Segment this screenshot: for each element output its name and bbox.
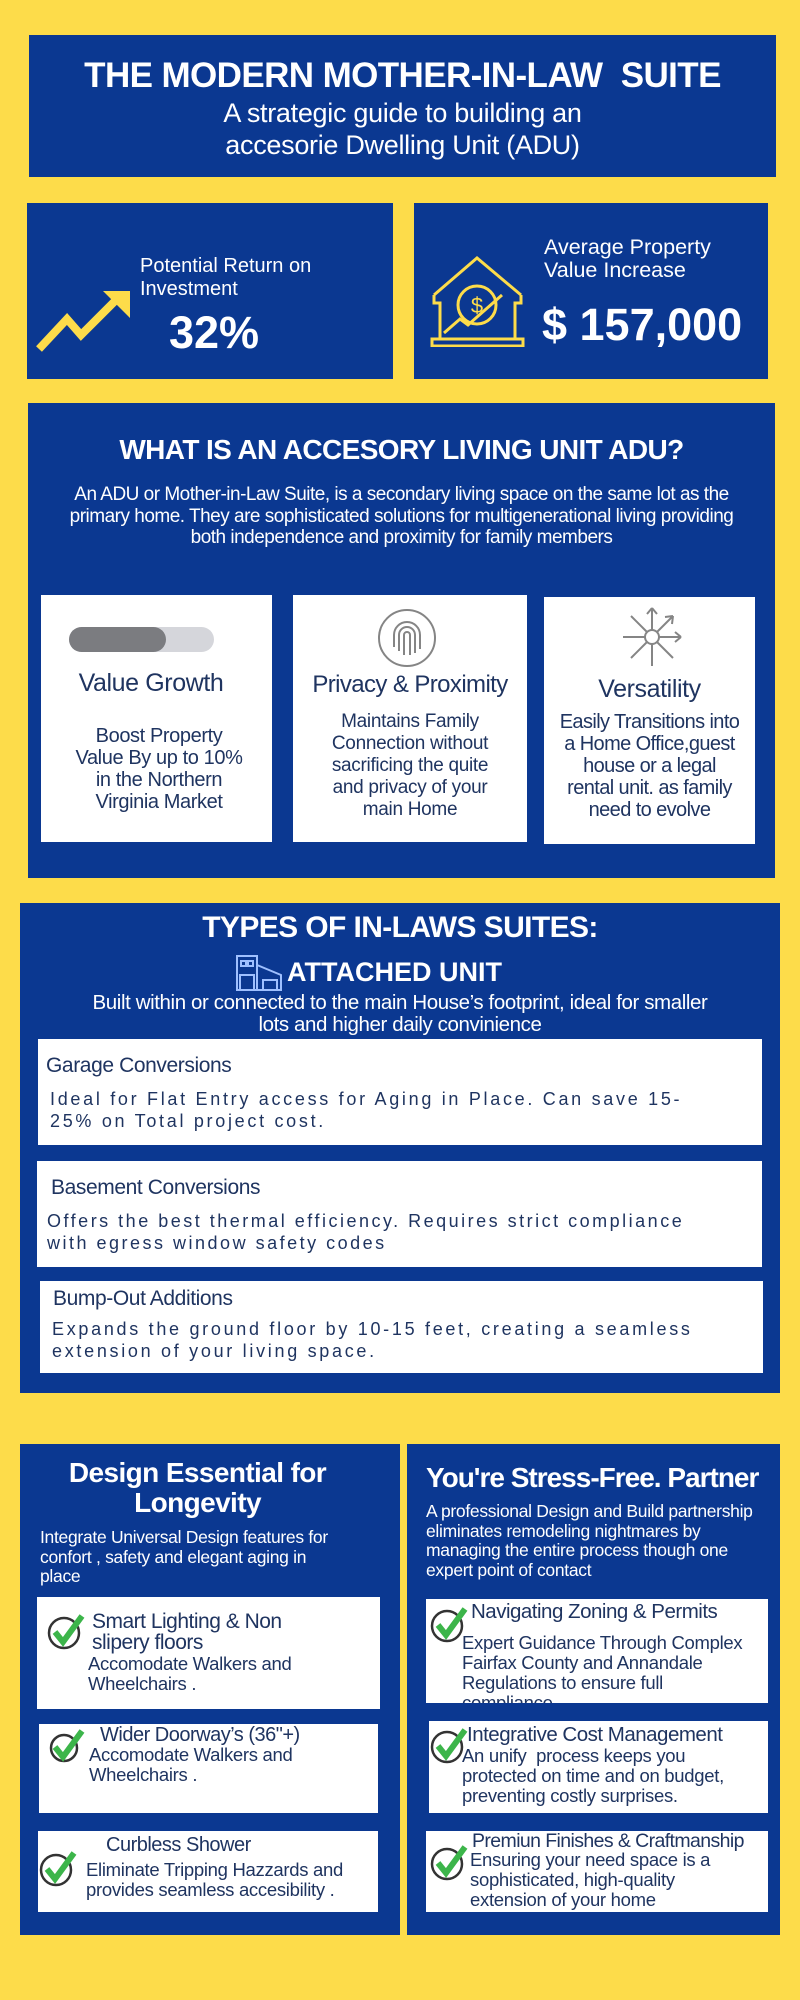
item: cost management: Integrative Cost Management	[467, 1723, 722, 1746]
heading: WHAT IS AN ACCESORY LIVING UNIT ADU?	[119, 434, 684, 465]
description: lots and higher daily convinience	[258, 1013, 542, 1036]
intro: place	[40, 1566, 80, 1586]
item: cost management: An unify process keeps you	[462, 1745, 685, 1766]
stat panel: ROI	[27, 203, 393, 379]
item: bump-out: extension of your living space.	[52, 1341, 377, 1361]
card text	[332, 711, 488, 820]
item: basement: Offers the best thermal efficiency. Requires strict compliance	[47, 1211, 684, 1231]
subheading with icon	[236, 955, 502, 991]
card text: rental unit. as family	[567, 777, 732, 799]
card: versatility	[544, 597, 755, 844]
card text: Virginia Market	[95, 791, 223, 813]
item: smart lighting: Smart Lighting & Non	[92, 1610, 282, 1633]
item: cost management: protected on time and on budget,	[462, 1765, 724, 1786]
item: premium finishes: Ensuring your need space is a	[470, 1849, 710, 1870]
subheading with icon: ATTACHED UNIT	[287, 957, 502, 987]
icon: house with dollar: $	[471, 293, 483, 318]
heading	[69, 1457, 326, 1518]
intro	[40, 1527, 328, 1586]
title: THE MODERN MOTHER-IN-LAW SUITE	[84, 56, 721, 95]
icon: check	[48, 1614, 84, 1650]
item: zoning: Expert Guidance Through Complex	[462, 1632, 742, 1653]
value: $ 157,000	[542, 299, 742, 350]
intro: eliminates remodeling nightmares by	[426, 1521, 700, 1541]
subtitle	[223, 98, 582, 160]
icon: radiating arrows	[623, 608, 682, 666]
item: curbless shower: provides seamless accesibility .	[86, 1879, 334, 1900]
panel: what is an ADU	[28, 403, 775, 878]
item: doorways: Wheelchairs .	[89, 1764, 197, 1785]
item: garage: 25% on Total project cost.	[50, 1111, 326, 1131]
card text: Easily Transitions into	[560, 711, 739, 733]
intro: confort , safety and elegant aging in	[40, 1546, 306, 1566]
intro: expert point of contact	[426, 1560, 591, 1580]
label	[140, 255, 311, 300]
item: basement	[37, 1161, 762, 1267]
card text: Value By up to 10%	[76, 747, 242, 769]
item: premium finishes: Premiun Finishes & Craftmanship	[472, 1830, 744, 1852]
icon: building	[236, 955, 282, 991]
item: garage: Garage Conversions	[46, 1054, 231, 1077]
item: premium finishes	[426, 1831, 768, 1912]
header panel	[29, 35, 776, 177]
item: garage	[38, 1039, 762, 1145]
icon: fingerprint	[378, 609, 436, 667]
item: basement: with egress window safety codes	[47, 1233, 387, 1253]
heading: Longevity	[134, 1487, 261, 1518]
label: Investment	[140, 278, 238, 300]
item: zoning: Regulations to ensure full	[462, 1672, 663, 1693]
stat panel: property value	[414, 203, 768, 379]
description: Built within or connected to the main House’s footprint, ideal for smaller	[93, 991, 707, 1014]
heading: Design Essential for	[69, 1457, 326, 1488]
item: smart lighting	[37, 1597, 380, 1709]
card text: sacrificing the quite	[332, 755, 488, 776]
icon: check	[430, 1607, 468, 1642]
icon: house with dollar	[430, 256, 524, 347]
icon: check	[40, 1851, 76, 1886]
item: smart lighting: Accomodate Walkers and	[88, 1653, 292, 1674]
intro	[426, 1501, 753, 1580]
item: garage: Ideal for Flat Entry access for Aging in Place. Can save 15-	[50, 1089, 682, 1109]
intro text: primary home. They are sophisticated solutions for multigenerational living providing	[70, 506, 733, 527]
card text: Connection without	[332, 733, 488, 754]
intro text: An ADU or Mother-in-Law Suite, is a secondary living space on the same lot as the	[74, 484, 729, 505]
subtitle: A strategic guide to building an	[223, 98, 582, 128]
label: Potential Return on	[140, 255, 311, 277]
card title: Privacy & Proximity	[312, 671, 508, 698]
panel: stress-free partner	[407, 1444, 780, 1935]
card text: in the Northern	[96, 769, 222, 791]
card title: Value Growth	[79, 669, 223, 697]
item: premium finishes: extension of your home	[470, 1889, 656, 1910]
item: curbless shower: Curbless Shower	[106, 1834, 251, 1856]
card: privacy	[293, 595, 527, 842]
panel: types of in-law suites	[20, 903, 780, 1393]
item: cost management: preventing costly surprises.	[462, 1785, 678, 1806]
card text: house or a legal	[583, 755, 716, 777]
intro: Integrate Universal Design features for	[40, 1527, 328, 1547]
subtitle: accesorie Dwelling Unit (ADU)	[225, 130, 580, 160]
item: premium finishes: sophisticated, high-quality	[470, 1869, 675, 1890]
item: zoning	[426, 1599, 768, 1703]
description	[93, 991, 708, 1036]
panel: design essentials	[20, 1444, 400, 1935]
heading: You're Stress-Free. Partner	[426, 1462, 758, 1493]
label: Average Property	[544, 235, 711, 259]
item: doorways: Wider Doorway’s (36"+)	[100, 1724, 300, 1746]
item: doorways: Accomodate Walkers and	[89, 1744, 293, 1765]
card text	[76, 725, 242, 813]
item: cost management	[429, 1721, 768, 1813]
intro: A professional Design and Build partnership	[426, 1501, 753, 1521]
intro text: both independence and proximity for family members	[191, 527, 612, 548]
item: smart lighting: slipery floors	[92, 1631, 203, 1654]
card text	[560, 711, 739, 821]
card text: Boost Property	[96, 725, 222, 747]
item: bump-out: Expands the ground floor by 10-15 feet, creating a seamless	[52, 1319, 693, 1339]
icon: check	[430, 1728, 468, 1764]
card text: need to evolve	[589, 799, 710, 821]
heading: TYPES OF IN-LAWS SUITES:	[202, 911, 598, 944]
icon: check	[50, 1729, 84, 1762]
label	[544, 235, 711, 282]
card text: and privacy of your	[333, 777, 487, 798]
item: doorways	[39, 1724, 378, 1813]
item: basement: Basement Conversions	[51, 1176, 260, 1199]
label: Value Increase	[544, 258, 686, 282]
icon: progress bar	[69, 627, 214, 652]
icon: trend arrow	[36, 291, 130, 352]
card text: Maintains Family	[341, 711, 479, 732]
item: bump-out	[40, 1281, 763, 1373]
value: 32%	[169, 307, 259, 358]
item: smart lighting: Wheelchairs .	[88, 1673, 196, 1694]
item: zoning: Navigating Zoning & Permits	[471, 1600, 717, 1623]
card text: a Home Office,guest	[564, 733, 735, 755]
item: bump-out: Bump-Out Additions	[53, 1287, 233, 1310]
card: value growth	[41, 595, 272, 842]
icon: check	[430, 1845, 468, 1880]
card title: Versatility	[598, 675, 701, 703]
item: curbless shower	[38, 1831, 378, 1912]
intro text	[70, 484, 733, 548]
intro: managing the entire process though one	[426, 1540, 728, 1560]
card text: main Home	[363, 799, 457, 820]
item: zoning: Fairfax County and Annandale	[462, 1652, 702, 1673]
item: curbless shower: Eliminate Tripping Hazzards and	[86, 1859, 343, 1880]
